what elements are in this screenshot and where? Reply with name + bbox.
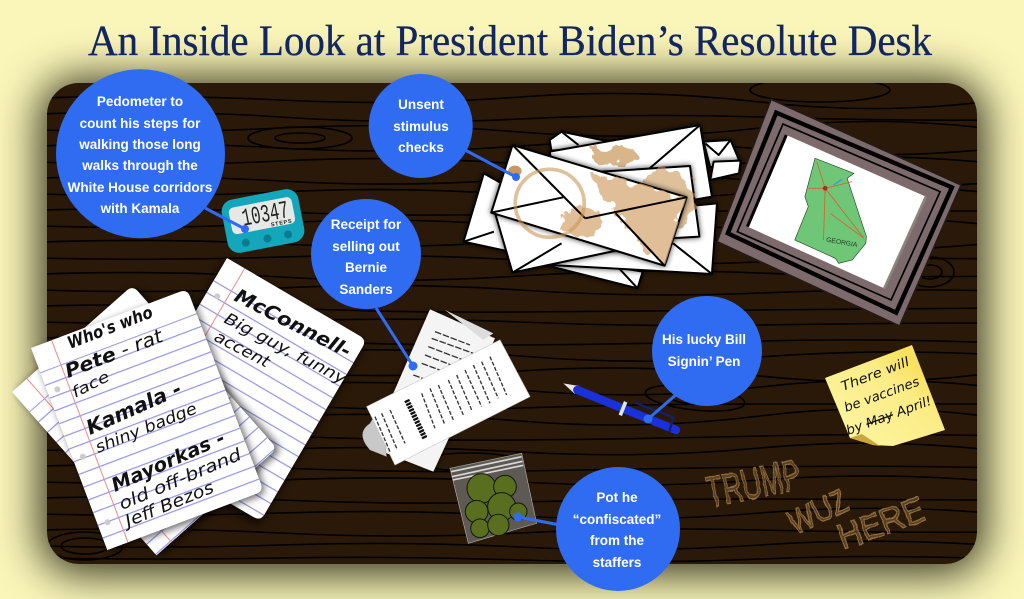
Kamala entry: shiny badge <box>92 399 200 457</box>
McConnell description: Big guy, funny <box>221 309 350 388</box>
blue pen <box>563 383 676 432</box>
Mayorkas entry <box>108 427 245 533</box>
pedometer: 10347 <box>240 196 291 234</box>
carved graffiti: TRUMP <box>702 450 805 518</box>
callout: pen: His lucky Bill <box>662 332 746 347</box>
wooden desk <box>40 78 1000 564</box>
callout: pot: staffers <box>593 555 641 570</box>
callout: pen: Signin’ Pen <box>668 354 740 369</box>
framed Georgia map <box>717 99 961 326</box>
carved graffiti <box>702 450 930 558</box>
Kamala entry <box>82 376 200 457</box>
Pete entry: Pete - rat <box>62 325 168 383</box>
callout: pen <box>644 296 762 424</box>
receipts <box>362 309 530 472</box>
notepad: McConnell note <box>116 257 368 527</box>
pedometer: STEPS <box>270 219 293 228</box>
map of Georgia <box>795 158 866 263</box>
Kamala entry: Kamala - <box>82 376 185 440</box>
callout: stimulus checks: Unsent <box>398 97 444 112</box>
sticky note text: by May April! <box>844 394 934 439</box>
title: An Inside Look at President Biden’s Resolute Desk <box>88 17 932 65</box>
carved graffiti: WUZ <box>782 482 855 542</box>
sticky note text <box>839 355 934 439</box>
callout: pot <box>514 467 680 591</box>
Pete entry <box>62 325 168 402</box>
callout: pedometer: walks through the <box>81 158 198 173</box>
Mayorkas entry: Mayorkas - <box>108 427 228 497</box>
pedometer <box>220 187 306 255</box>
callout: stimulus checks: checks <box>398 140 444 155</box>
Pete entry: face <box>69 367 112 402</box>
callout: receipt: Bernie <box>345 260 387 275</box>
envelopes with coffee stains <box>464 125 741 288</box>
callout: pedometer: with Kamala <box>100 201 180 216</box>
bag of pot <box>450 453 537 543</box>
Who's who heading: Who's who <box>65 303 156 354</box>
callout: pedometer: walking those long <box>78 137 201 152</box>
callout: pedometer: count his steps for <box>80 116 201 131</box>
callout: receipt: selling out <box>332 239 400 254</box>
callout: pot: “confiscated” <box>573 512 661 527</box>
callout: stimulus checks <box>369 74 520 181</box>
desk shadow glow <box>47 84 977 564</box>
callout: stimulus checks: stimulus <box>393 119 449 134</box>
callout: receipt: Sanders <box>339 282 393 297</box>
McConnell description: accent <box>211 327 274 372</box>
sticky note text: There will <box>839 355 912 395</box>
callout: receipt <box>311 199 421 370</box>
McConnell heading: McConnell- <box>231 285 355 363</box>
Mayorkas entry: Jeff Bezos <box>119 478 217 533</box>
callout: pedometer: White House corridors <box>68 180 212 195</box>
notepad: Who's who note <box>31 288 267 553</box>
callout: receipt: Receipt for <box>331 217 402 232</box>
notepad: back sheet <box>12 283 282 558</box>
callout: pot: from the <box>590 533 644 548</box>
callout: pot: Pot he <box>596 490 638 505</box>
map of Georgia: GEORGIA <box>826 237 858 249</box>
sticky note text: be vaccines <box>842 375 922 416</box>
carved graffiti: HERE <box>832 488 930 558</box>
sticky note <box>825 345 945 446</box>
callout: pedometer: Pedometer to <box>97 94 183 109</box>
callout: pedometer <box>56 69 249 238</box>
Mayorkas entry: old off-brand <box>116 445 245 515</box>
